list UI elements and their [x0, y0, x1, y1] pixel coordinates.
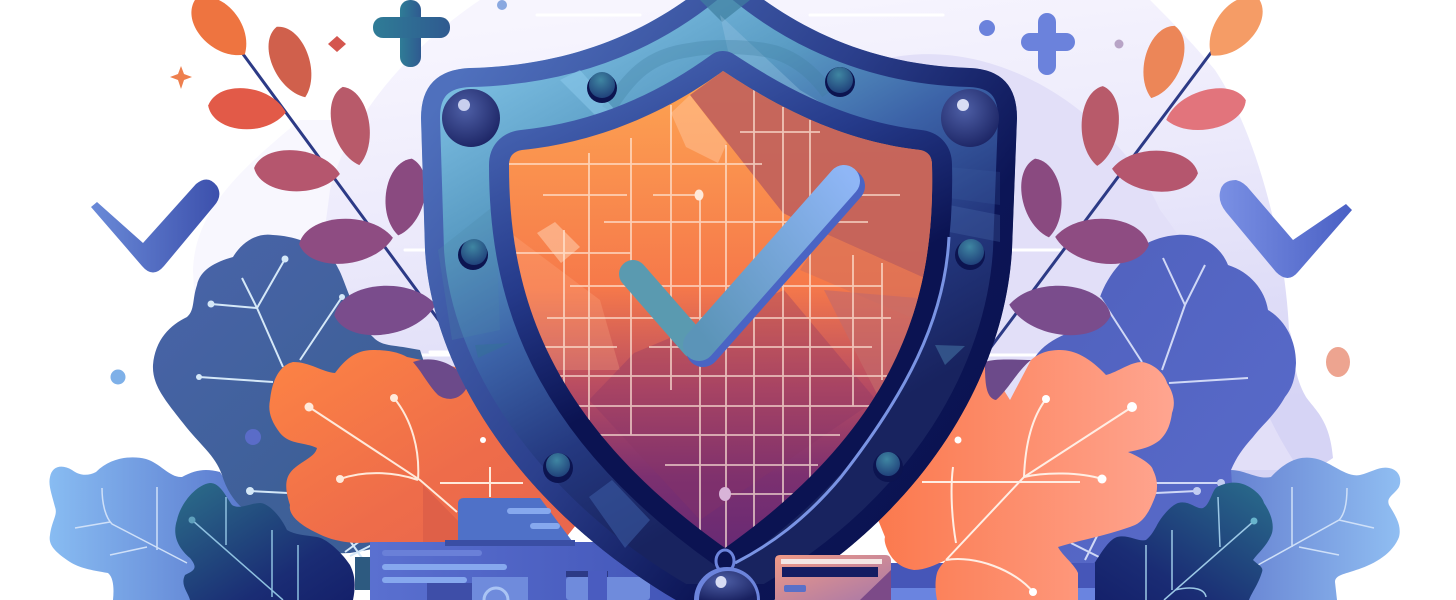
right branch with leaves — [985, 0, 1274, 355]
icon: orange sparkle — [170, 66, 192, 89]
face facets and grid — [500, 71, 940, 548]
dot on left leaf — [245, 429, 261, 445]
right pale blue corner leaf — [1180, 458, 1400, 600]
right navy leaf — [1090, 483, 1273, 600]
icon: right check — [1220, 180, 1352, 278]
background lavender blob — [193, 0, 1333, 480]
icon: blue plus — [1021, 13, 1075, 75]
top decorative lines — [395, 15, 1060, 355]
icon: red diamond — [328, 36, 346, 52]
icon: teal plus — [373, 0, 450, 67]
shield padlock — [694, 550, 760, 600]
left navy leaf — [175, 483, 355, 600]
bottom blue panel right — [885, 563, 1095, 600]
shield facets — [438, 0, 1000, 548]
left orange leaf — [269, 350, 580, 545]
left dark blue leaf — [153, 235, 480, 558]
left pale blue corner leaf — [49, 457, 300, 600]
left branch with leaves — [180, 0, 440, 340]
right dark blue leaf — [1010, 235, 1296, 600]
shield outer body — [421, 0, 1017, 600]
shield — [421, 0, 1017, 600]
shield orange face — [509, 71, 932, 548]
shield inner band — [509, 71, 932, 548]
rivets — [442, 67, 999, 483]
right orange leaf — [870, 350, 1174, 600]
thin blue seam — [735, 237, 949, 563]
small decorative dots — [110, 0, 1350, 384]
icon: left check — [91, 179, 219, 272]
check mark — [633, 181, 848, 350]
document cards stack — [355, 498, 680, 600]
credit card — [775, 555, 891, 600]
